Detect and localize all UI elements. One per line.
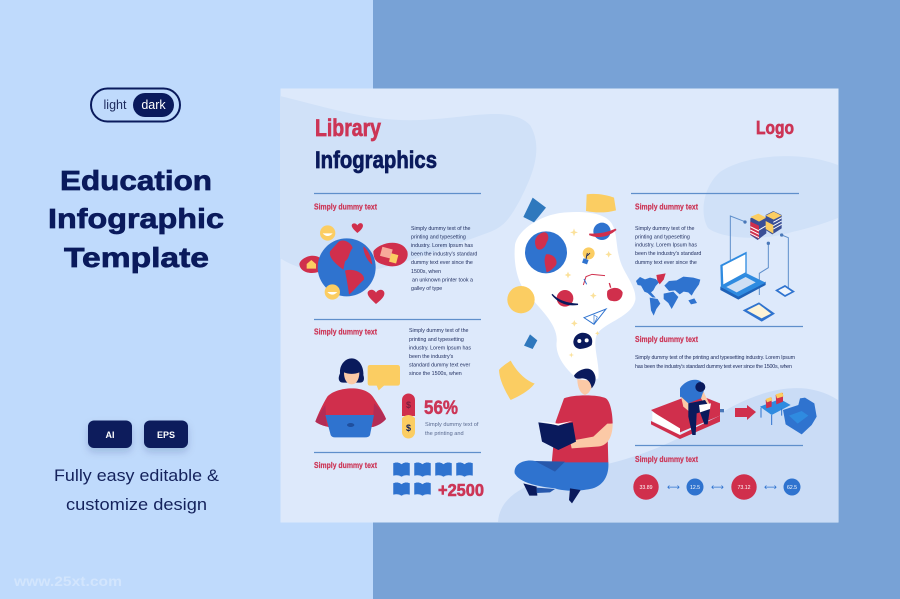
circle 73.12 [731, 474, 757, 500]
pill chart: $ [406, 423, 411, 433]
person on giant book [651, 380, 724, 439]
section: comparison circles [633, 454, 800, 500]
main title [48, 165, 224, 273]
pill chart [402, 394, 415, 438]
main title: Infographic [48, 203, 224, 234]
reader figure [515, 369, 613, 503]
body text: has been the industry's standard dummy text ever since the 1500s, when [635, 364, 792, 370]
background: left light band [0, 0, 373, 599]
body text: Simply dummy text of the printing and typesetting industry. Lorem Ipsum [635, 355, 796, 361]
thought cloud [515, 212, 635, 380]
body text: been the industry's [409, 354, 454, 360]
badge: AI: AI [106, 430, 114, 440]
heading: Simply dummy text [314, 460, 377, 470]
arrow: ⟷ [711, 483, 724, 493]
section: books count [314, 460, 484, 500]
circle 62.5: 62.5 [787, 485, 797, 491]
heading: Simply dummy text [635, 202, 698, 212]
body text: Simply dummy text of the [409, 328, 469, 334]
background: right blue band [373, 0, 900, 599]
cloud icons [525, 223, 623, 358]
circle 33.89: 33.89 [640, 485, 653, 491]
statistic +2500: +2500 [438, 480, 484, 500]
body text: printing and typesetting [409, 337, 464, 343]
body text: printing and typesetting [635, 234, 690, 240]
body text: since the 1500s, when [409, 371, 462, 377]
circle 62.5 [784, 478, 800, 496]
tagline [54, 466, 220, 514]
arrow [735, 405, 756, 420]
statistic caption: the printing and [425, 431, 464, 437]
body text: been the industry's standard [411, 252, 477, 258]
body text: industry. Lorem Ipsum has [409, 346, 471, 352]
main title: Template [64, 242, 209, 273]
section: globe social [299, 202, 477, 304]
world map [636, 273, 700, 316]
main title: Education [60, 165, 212, 196]
body text: industry. Lorem Ipsum has [635, 242, 697, 248]
heading: Simply dummy text [314, 202, 377, 212]
toggle: light and dark: light [104, 98, 127, 112]
heading: Simply dummy text [314, 326, 377, 336]
watermark: www.25xt.com [13, 573, 122, 589]
toggle: light and dark [91, 88, 180, 122]
circle 12.5 [686, 478, 704, 496]
body text: Simply dummy text of the [411, 226, 471, 232]
heading: Simply dummy text [635, 454, 698, 464]
toggle: light and dark: dark [141, 98, 166, 112]
body text: printing and typesetting [411, 234, 466, 240]
globe illustration [299, 223, 408, 304]
circle 33.89 [633, 474, 659, 500]
room with table and chair [760, 392, 817, 434]
body text: 1500s, when [411, 269, 441, 275]
woman with laptop [315, 358, 400, 437]
body text: industry. Lorem Ipsum has [411, 243, 473, 249]
body text [635, 355, 796, 370]
statistic caption [425, 422, 479, 437]
body text: galley of type [411, 286, 442, 292]
statistic caption: Simply dummy text of [425, 422, 479, 428]
book icons [393, 462, 473, 496]
badge: EPS [144, 420, 188, 448]
center illustration: reader and thought cloud [499, 194, 635, 503]
body text: dummy text ever since the [635, 260, 697, 266]
logo: Logo [756, 117, 794, 138]
laptop network illustration [720, 211, 795, 322]
circle 12.5: 12.5 [690, 485, 700, 491]
body text [409, 328, 471, 377]
body text: an unknown printer took a [412, 278, 473, 284]
section: reader statistic [314, 326, 479, 438]
body text: Simply dummy text of the [635, 226, 695, 232]
arrow: ⟷ [667, 483, 680, 493]
body text: been the industry's standard [635, 251, 701, 257]
body text [411, 226, 477, 292]
arrow: ⟷ [764, 483, 777, 493]
body text: standard dummy text ever [409, 362, 470, 368]
panel: infographic sheet [280, 88, 838, 522]
section: reading transformation [635, 334, 817, 439]
heading: Library Infographics: Infographics [315, 147, 437, 174]
heading: Library Infographics [315, 115, 437, 174]
badge: EPS: EPS [157, 430, 175, 440]
statistic 56%: 56% [424, 398, 458, 419]
paper shapes [499, 194, 616, 400]
badge: AI [88, 420, 132, 448]
pill chart: $ [406, 400, 411, 410]
circle 73.12: 73.12 [738, 485, 751, 491]
heading: Library Infographics: Library [315, 115, 382, 142]
tagline: Fully easy editable & [54, 466, 220, 485]
section: data and devices [635, 202, 795, 322]
body text [635, 226, 701, 266]
body text: dummy text ever since the [411, 260, 473, 266]
tagline: customize design [66, 495, 207, 514]
heading: Simply dummy text [635, 334, 698, 344]
